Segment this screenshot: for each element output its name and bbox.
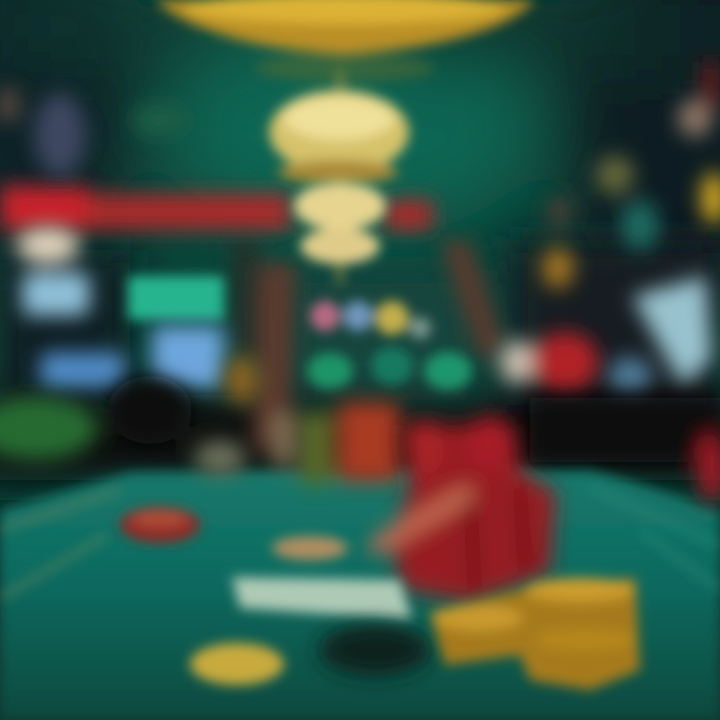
table felt bbox=[0, 468, 720, 720]
right side lights bbox=[542, 62, 720, 289]
right red and white shape bbox=[500, 332, 599, 392]
central red and olive stacks bbox=[272, 402, 400, 484]
green discs bbox=[307, 347, 472, 390]
right dark furniture and red blob bbox=[530, 398, 720, 502]
black chip stack bbox=[319, 624, 431, 676]
top chandelier bbox=[155, 0, 535, 82]
gold chip stacks bbox=[430, 578, 640, 690]
coloured lights bbox=[310, 301, 431, 339]
left signs bbox=[0, 87, 188, 388]
central chandelier bbox=[269, 70, 409, 284]
gold coin bbox=[190, 643, 284, 685]
dark floor band and pillars bbox=[0, 240, 720, 480]
green and blue screen bbox=[128, 276, 224, 388]
red chip stack bbox=[378, 416, 556, 602]
lower chandelier tier bbox=[294, 182, 386, 264]
left green foliage bbox=[0, 356, 260, 476]
left red chips bbox=[120, 507, 200, 543]
red banner bbox=[0, 186, 433, 230]
playing cards bbox=[232, 536, 412, 620]
back wall bbox=[0, 0, 720, 500]
right pale blue triangle bbox=[608, 276, 712, 393]
